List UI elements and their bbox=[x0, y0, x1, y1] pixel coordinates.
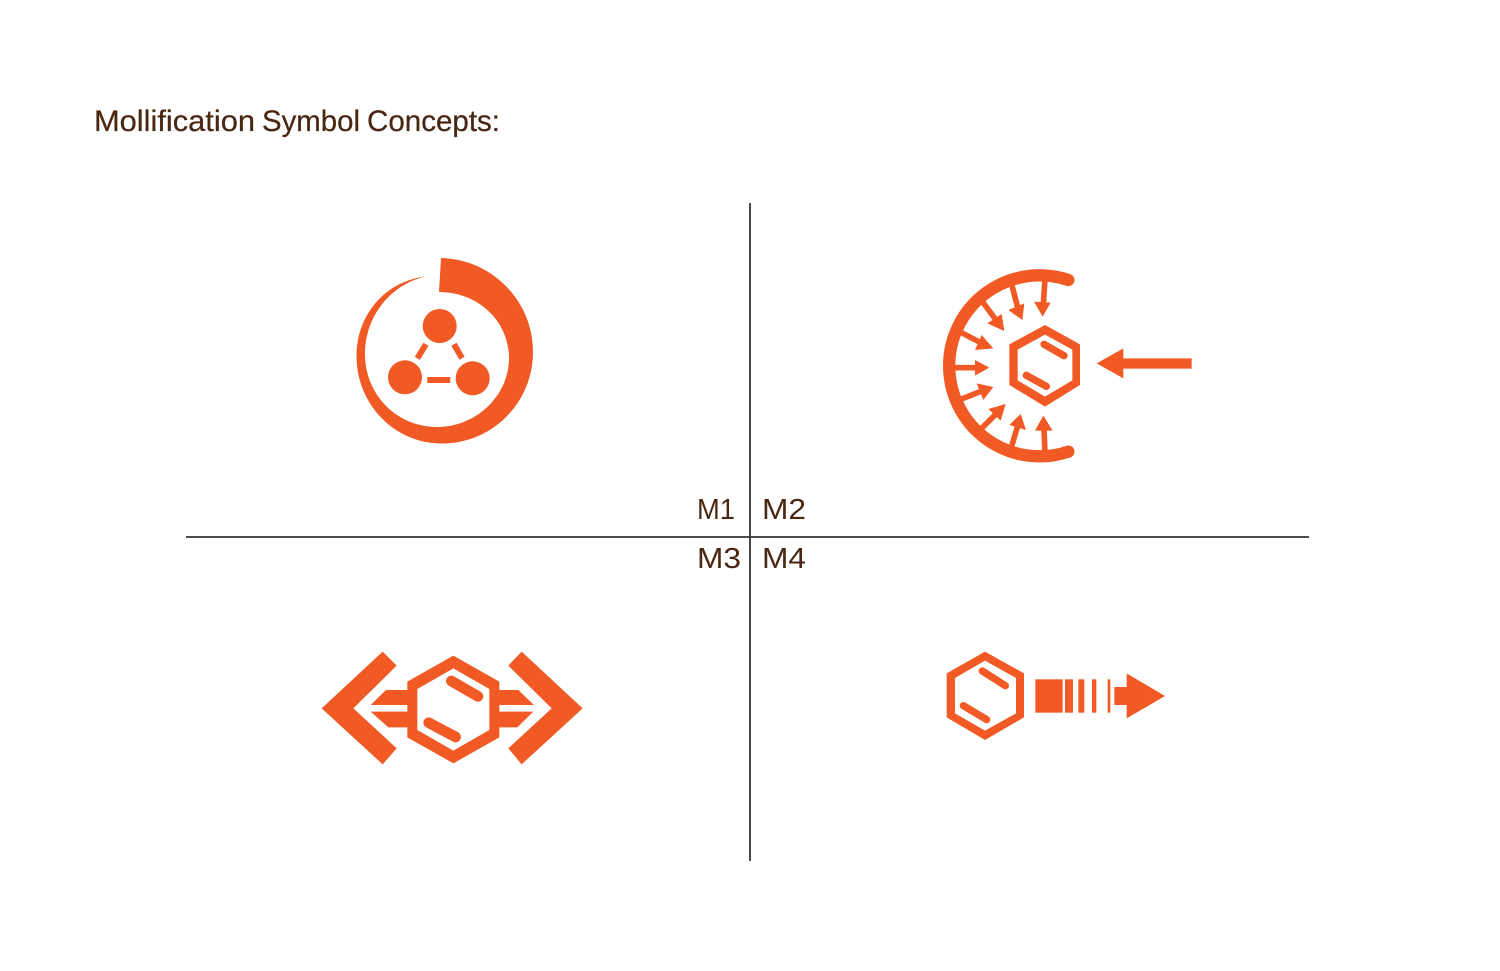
quadrant labels: M3 bbox=[697, 543, 741, 575]
title: Mollification bbox=[94, 105, 255, 138]
icon: M4 hexagon with fading arrow bbox=[947, 652, 1165, 740]
semicircular shell bbox=[949, 275, 1068, 456]
large arrow pointing left bbox=[1097, 348, 1192, 378]
title: Symbol bbox=[262, 105, 360, 138]
fading bars bbox=[1035, 679, 1110, 713]
hexagon bbox=[407, 656, 499, 763]
connecting dashes bbox=[417, 344, 462, 383]
hexagon double bonds bbox=[1026, 344, 1064, 386]
three nodes bbox=[388, 309, 490, 395]
icon: M1 spiral ring with three linked nodes bbox=[356, 258, 533, 444]
quadrant axes bbox=[186, 203, 1309, 861]
arrow pointing right bbox=[1114, 673, 1165, 718]
inward arrows bbox=[950, 278, 1053, 454]
title: Concepts: bbox=[367, 105, 500, 138]
quadrant labels: M4 bbox=[762, 543, 806, 575]
icon: M3 hexagon with outward chevrons bbox=[322, 652, 583, 764]
hexagon double bonds bbox=[429, 681, 478, 737]
icon: M2 hexagon under inward pressure bbox=[949, 275, 1192, 456]
side wings bbox=[371, 690, 534, 727]
hexagon bbox=[947, 652, 1024, 740]
quadrant labels: M2 bbox=[762, 494, 806, 526]
quadrant labels bbox=[697, 494, 806, 575]
hexagon bbox=[1009, 325, 1080, 407]
quadrant labels: M1 bbox=[697, 494, 735, 526]
hexagon double bonds bbox=[963, 671, 1005, 720]
chevrons bbox=[322, 652, 583, 764]
spiral ring bbox=[356, 258, 533, 444]
